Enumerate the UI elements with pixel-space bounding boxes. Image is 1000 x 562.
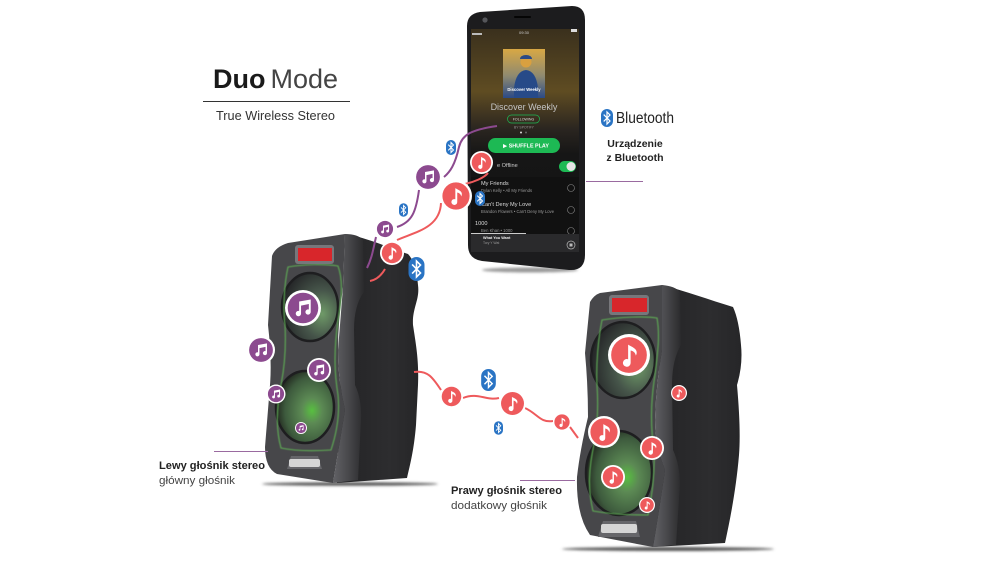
red note large <box>440 180 472 212</box>
status bar: 09:30 <box>519 30 530 35</box>
now playing bar <box>471 233 579 252</box>
bluetooth between speakers small <box>494 421 503 435</box>
note beside speaker <box>247 336 275 364</box>
left speaker leader line <box>214 451 268 452</box>
by spotify: BY SPOTIFY <box>514 126 535 130</box>
right speaker front lights <box>598 521 640 537</box>
track list: Dylan Kelly • All My Friends <box>481 188 532 193</box>
now playing bar: What You Want <box>483 236 511 240</box>
bluetooth device label <box>586 109 674 182</box>
bluetooth icons <box>399 140 503 435</box>
bluetooth logo: Bluetooth <box>616 110 674 127</box>
left speaker purple notes <box>247 290 331 434</box>
track list <box>471 177 579 234</box>
left speaker floor shadow <box>262 482 438 486</box>
left speaker front lights <box>287 456 322 469</box>
red note one <box>440 385 463 408</box>
track list: Ben Khan • 1000 <box>481 228 513 233</box>
right speaker lower woofer <box>586 431 652 515</box>
track list: My Friends <box>481 181 509 187</box>
left speaker caption: główny głośnik <box>159 475 236 487</box>
track list: 1000 <box>475 221 487 227</box>
right speaker red notes <box>588 334 687 513</box>
title: Duo Mode: DuoMode <box>213 64 338 94</box>
note woofer <box>601 465 625 489</box>
red note three <box>553 413 571 431</box>
title block <box>203 64 350 123</box>
left speaker caption: Lewy głośnik stereo <box>159 460 265 472</box>
purple note near phone <box>414 163 442 191</box>
playlist title: Discover Weekly <box>491 102 558 112</box>
title underline <box>203 101 350 102</box>
right speaker front grille <box>577 285 665 547</box>
album art <box>503 49 545 98</box>
left speaker <box>159 234 438 487</box>
right speaker handle <box>609 295 649 315</box>
left speaker side <box>337 234 418 483</box>
note left <box>588 416 620 448</box>
right speaker leader line <box>520 480 575 481</box>
bluetooth mid path <box>399 203 408 217</box>
purple note near speaker <box>376 220 394 238</box>
right speaker upper woofer <box>591 322 655 398</box>
device leader line <box>586 181 643 182</box>
right speaker caption: dodatkowy głośnik <box>451 500 548 512</box>
purple signal path phone to left speaker <box>367 126 497 268</box>
red signal path between speakers <box>414 372 578 438</box>
red note near speaker <box>380 241 404 265</box>
subtitle: True Wireless Stereo <box>216 109 335 123</box>
phone top bezel details <box>482 16 531 23</box>
bluetooth on speaker <box>408 257 424 281</box>
note low <box>639 497 655 513</box>
bluetooth between speakers large <box>481 369 496 391</box>
device caption: z Bluetooth <box>606 152 664 164</box>
status bar <box>472 29 577 35</box>
shuffle play button <box>488 138 560 153</box>
note large <box>285 290 321 326</box>
left speaker upper woofer <box>282 273 338 341</box>
left speaker front grille <box>265 234 345 483</box>
right speaker caption: Prawy głośnik stereo <box>451 485 562 497</box>
speaker to speaker note icons <box>440 385 571 431</box>
note small <box>266 384 286 404</box>
left speaker edge strip <box>333 234 364 483</box>
left speaker handle <box>295 245 334 264</box>
phone shadow <box>482 268 578 272</box>
red note on phone <box>470 151 493 174</box>
note tiny <box>295 422 307 434</box>
following pill: FOLLOWING <box>513 118 534 122</box>
bluetooth on phone <box>475 191 485 206</box>
now playing bar: Tory Y Wat <box>483 241 499 245</box>
right speaker floor shadow <box>562 547 774 551</box>
device caption: Urządzenie <box>607 138 663 150</box>
available offline row: e Offline <box>497 163 518 169</box>
phone screen <box>471 29 579 252</box>
note large <box>608 334 650 376</box>
track list: Brandon Flowers • Can't Deny My Love <box>481 209 555 214</box>
right speaker <box>451 285 774 551</box>
note right <box>640 436 664 460</box>
phone body <box>467 6 585 270</box>
left speaker green light ring <box>277 265 341 451</box>
bluetooth near phone <box>446 140 456 155</box>
note side <box>671 385 687 401</box>
page dots <box>520 132 527 134</box>
smartphone <box>467 6 585 272</box>
left speaker lower woofer <box>276 371 334 443</box>
right speaker side <box>653 285 742 547</box>
following pill <box>508 115 540 123</box>
red signal path phone to left speaker <box>370 173 488 281</box>
shuffle play button: ▶ SHUFFLE PLAY <box>503 144 549 150</box>
available offline row <box>497 161 576 172</box>
note mid <box>307 358 331 382</box>
album art: Discover Weekly <box>507 87 541 92</box>
right speaker edge strip <box>653 285 681 547</box>
track list: Can't Deny My Love <box>481 202 531 208</box>
right speaker green light ring <box>589 317 658 515</box>
phone to speaker note icons <box>376 151 493 265</box>
red note two <box>499 390 526 417</box>
